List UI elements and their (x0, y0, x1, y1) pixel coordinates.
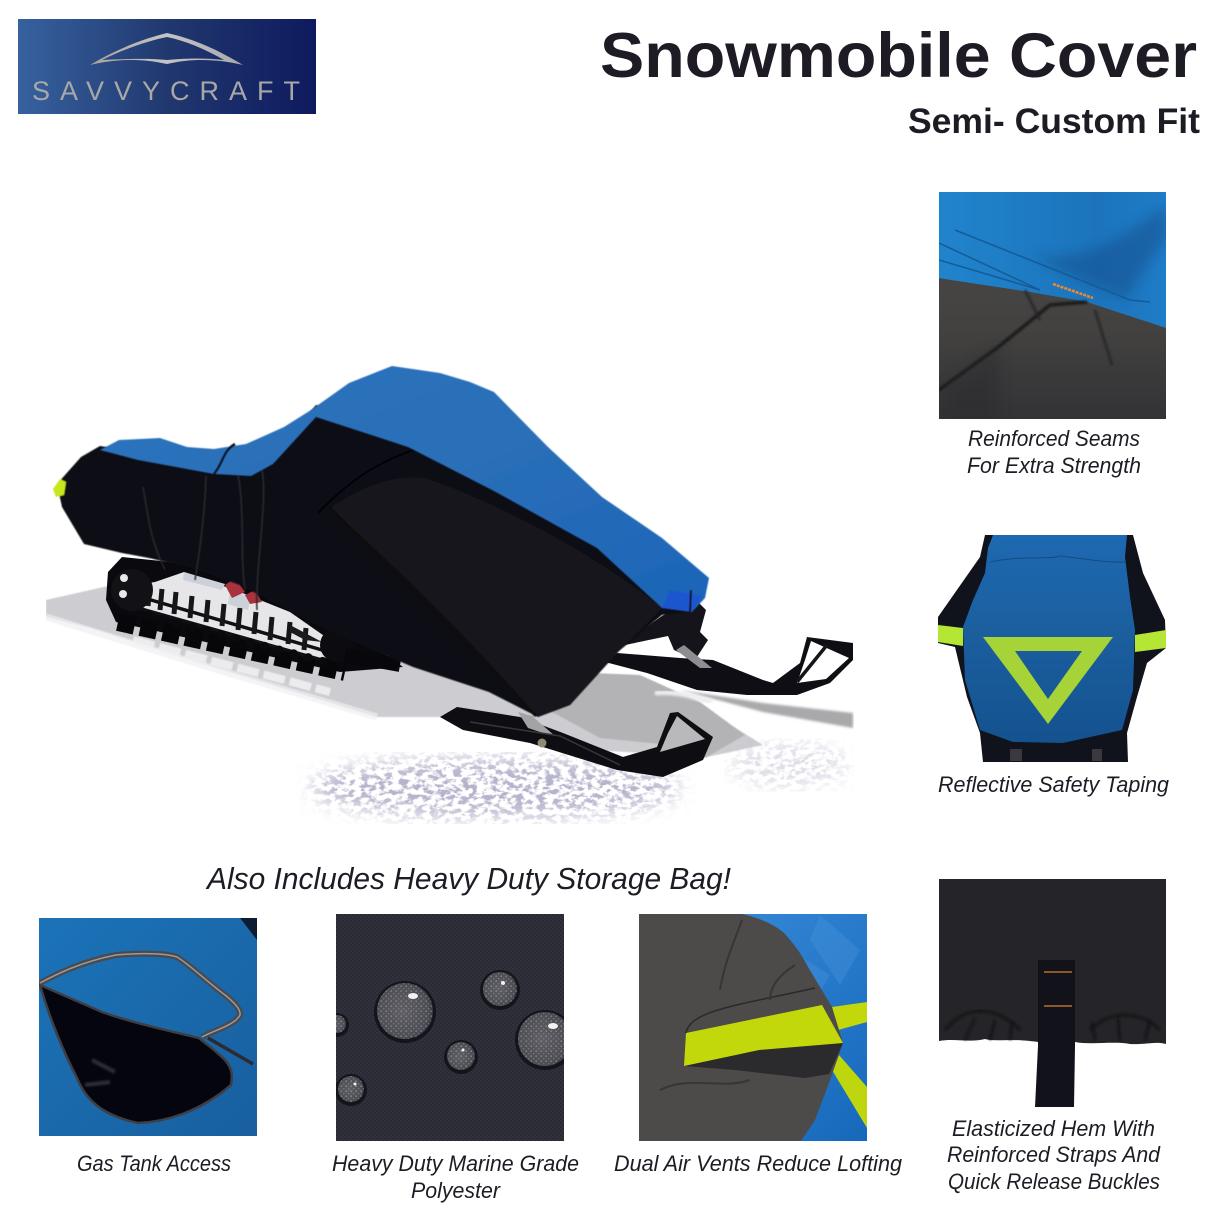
track and rails (106, 557, 403, 672)
caption: marine grade polyester: Polyester (411, 1178, 502, 1203)
caption: marine grade polyester: Heavy Duty Marine Grade (332, 1151, 579, 1176)
logo: Savvycraft: SAVVYCRAFT (32, 76, 300, 106)
far ski (605, 598, 853, 695)
caption: reinforced seams: For Extra Strength (967, 453, 1141, 478)
caption: gas tank access: Gas Tank Access (77, 1151, 231, 1176)
panel: dual air vents photo (639, 914, 867, 1141)
panel: elasticized hem photo (939, 879, 1166, 1107)
logo: Savvycraft (18, 19, 316, 114)
caption: reinforced seams (967, 426, 1141, 478)
reflective tag (53, 479, 66, 497)
panel: reinforced seams photo (938, 192, 1166, 419)
snow ground shadow (46, 586, 853, 758)
caption: reinforced seams: Reinforced Seams (968, 426, 1140, 451)
title: Snowmobile Cover (600, 21, 1197, 91)
caption: elasticized hem: Elasticized Hem With (952, 1116, 1155, 1141)
caption: marine grade polyester (332, 1151, 579, 1203)
cover: black body (53, 405, 690, 717)
cover: blue top (100, 366, 709, 612)
panel: gas tank access photo (39, 918, 257, 1136)
caption: elasticized hem: Quick Release Buckles (948, 1169, 1160, 1194)
caption: elasticized hem: Reinforced Straps And (947, 1142, 1161, 1167)
main photo: snowmobile with cover (46, 366, 853, 818)
track lugs (118, 622, 345, 672)
panel: reflective safety taping photo (938, 535, 1166, 762)
panel: marine grade polyester photo (325, 914, 575, 1141)
caption: elasticized hem (947, 1116, 1161, 1194)
caption: reflective safety taping: Reflective Safety Taping (938, 772, 1170, 797)
near ski (440, 707, 713, 777)
water drops (325, 970, 575, 1106)
caption: dual air vents: Dual Air Vents Reduce Lofting (614, 1151, 903, 1176)
snow texture (310, 743, 850, 818)
heading: storage bag note: Also Includes Heavy Duty Storage Bag! (205, 861, 731, 896)
ski tip opening (660, 716, 705, 752)
subtitle: Semi- Custom Fit (908, 102, 1200, 141)
